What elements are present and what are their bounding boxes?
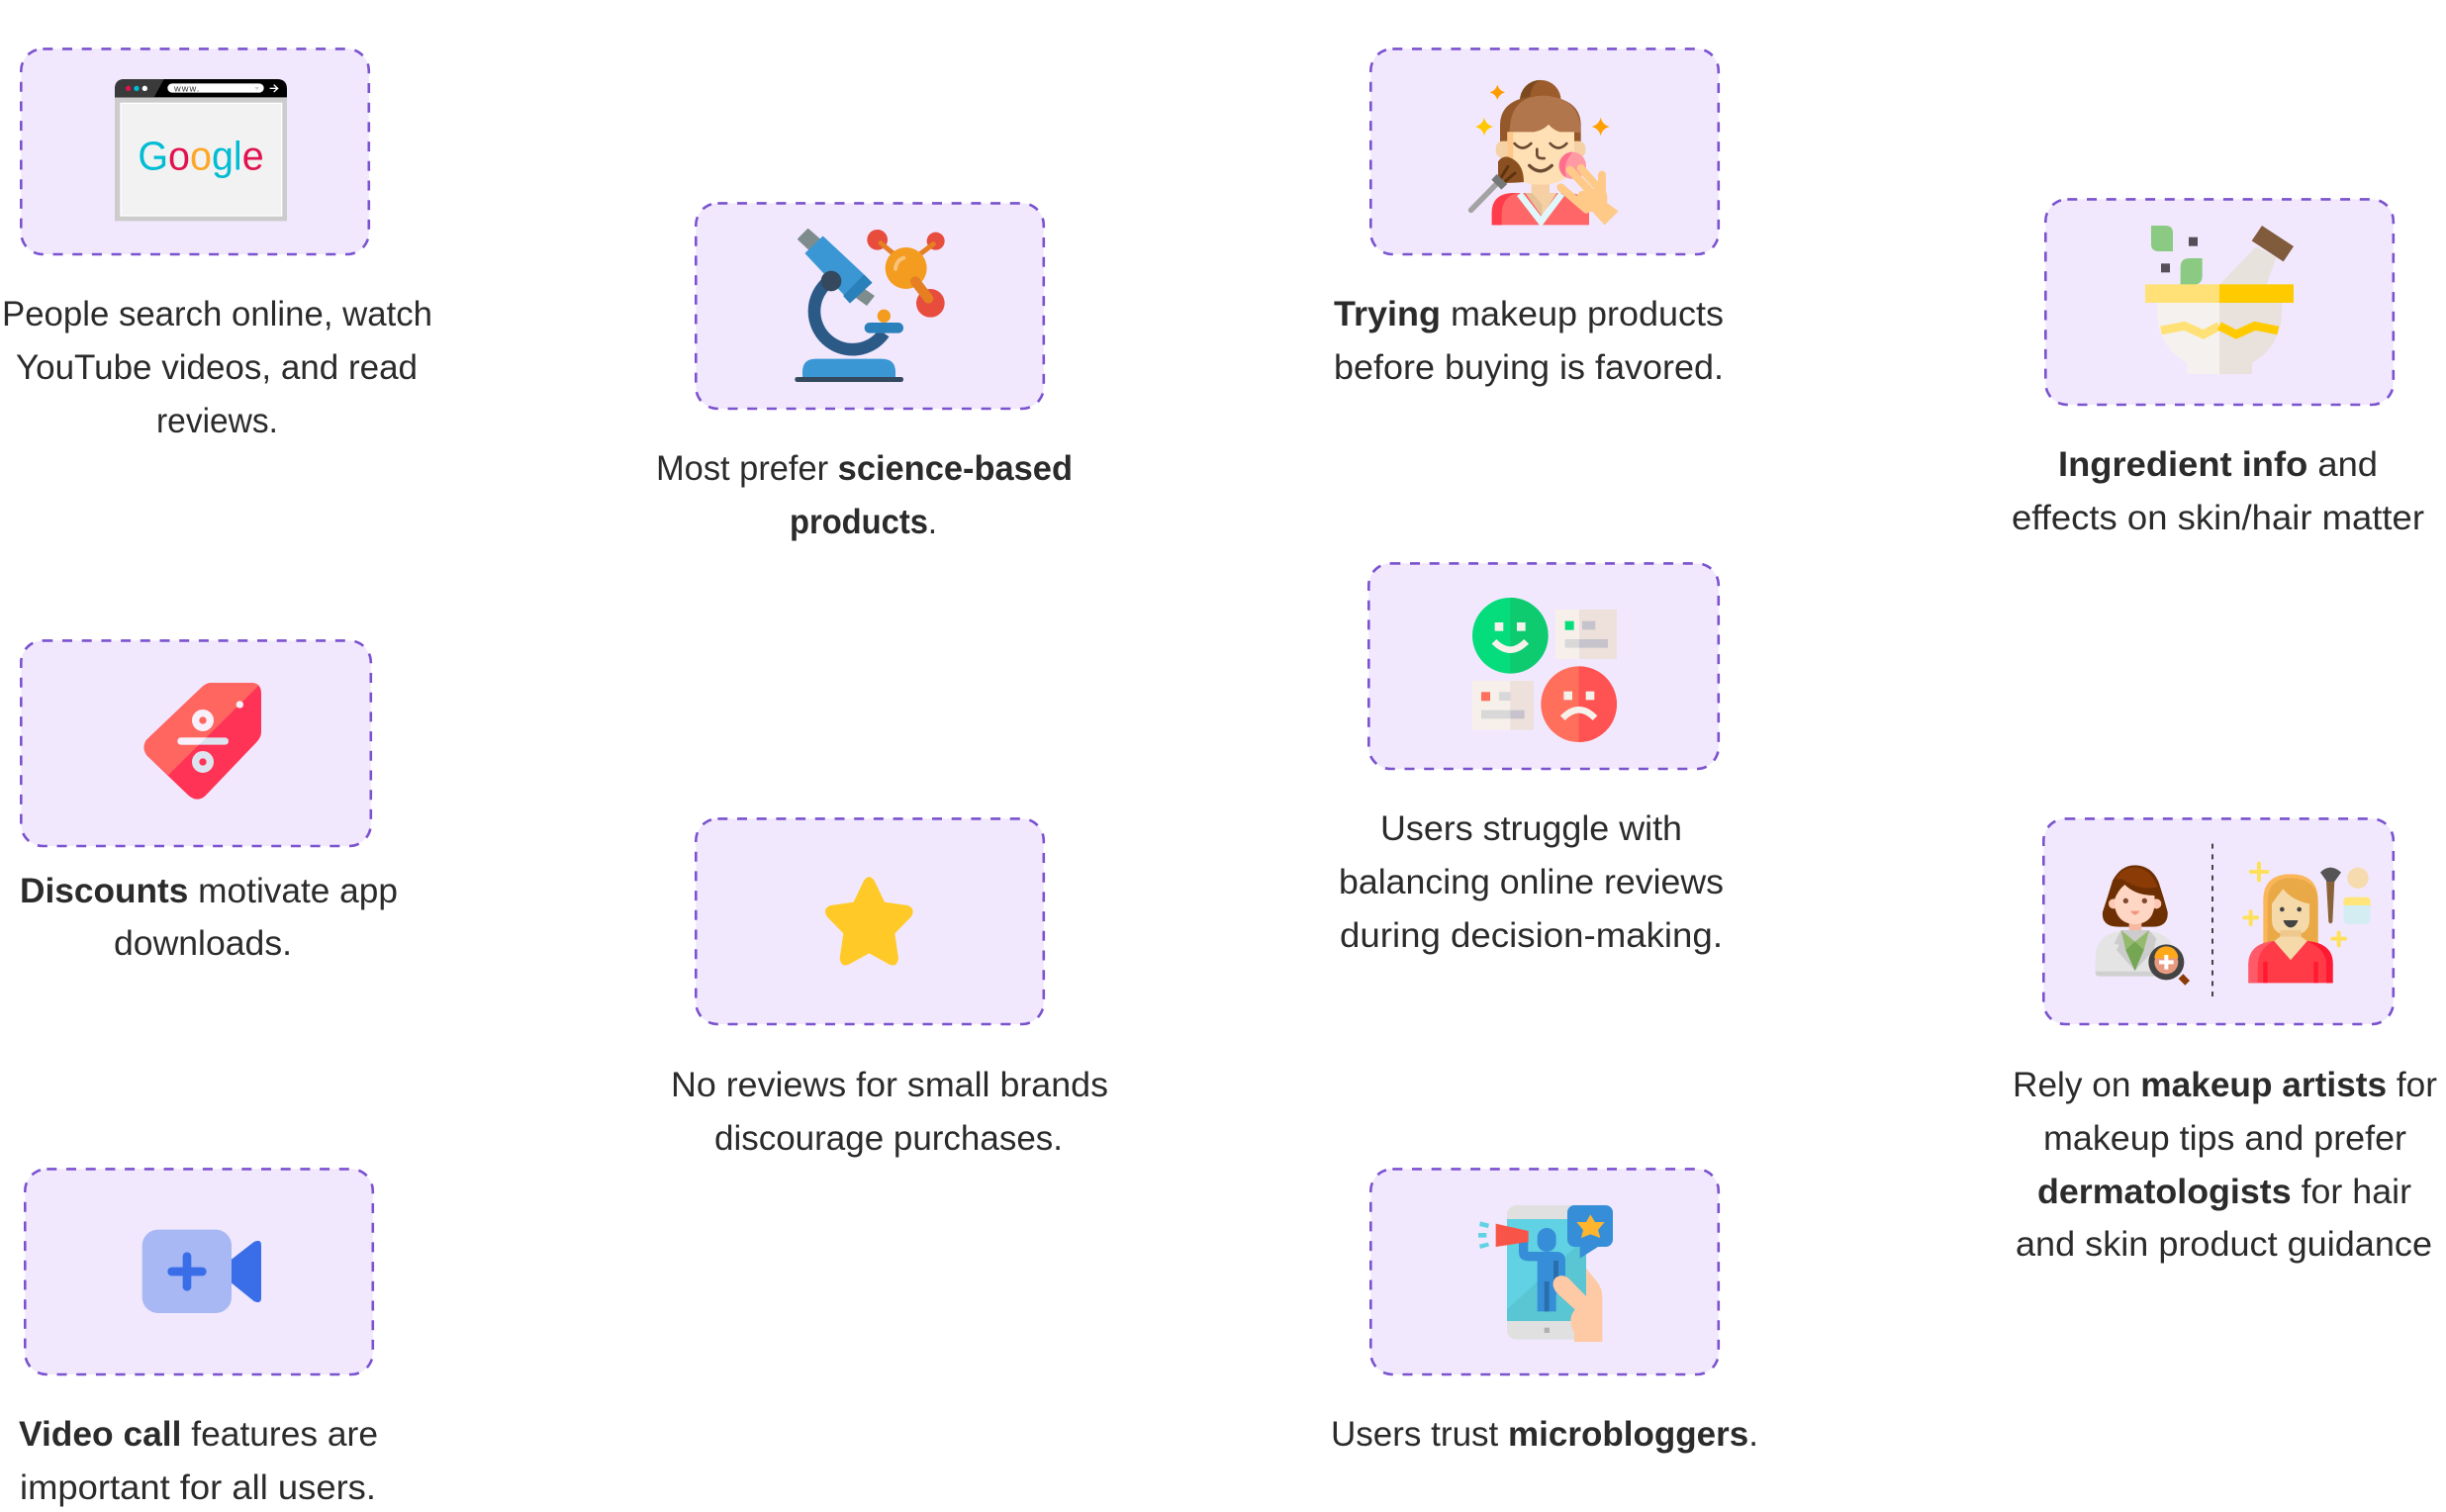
text: small brands reviews: [671, 1066, 1108, 1158]
panel: trying makeup: [1334, 48, 1724, 387]
icon: video camera plus: [142, 1230, 261, 1313]
panel: microbloggers: [1331, 1169, 1758, 1454]
icon: star: [825, 877, 913, 965]
icon: phone with influencer: [1478, 1205, 1613, 1342]
text: small brands reviews: discourage purchases.: [714, 1119, 1063, 1158]
text: ingredient info: [2012, 445, 2424, 537]
text: discounts: downloads.: [114, 924, 292, 963]
text: balancing reviews: during decision-making.: [1340, 916, 1723, 955]
text: video call: Video call features are: [19, 1415, 378, 1454]
text: ingredient info: Ingredient info and: [2058, 445, 2378, 484]
text: discounts: Discounts motivate app: [20, 872, 398, 910]
panel: makeup artists and dermatologists: [2013, 818, 2437, 1264]
text: small brands reviews: No reviews for small brands: [671, 1066, 1108, 1104]
text: ingredient info: effects on skin/hair matter: [2012, 499, 2424, 537]
panel: discounts: [20, 640, 398, 963]
text: trying makeup: Trying makeup products: [1334, 295, 1724, 333]
text: makeup artists and dermatologists: and skin product guidance: [2016, 1225, 2432, 1264]
text: balancing reviews: [1339, 809, 1724, 955]
text: balancing reviews: Users struggle with: [1380, 809, 1682, 848]
text: balancing reviews: balancing online reviews: [1339, 863, 1724, 901]
text: online search: [2, 295, 432, 440]
panel: online search: [2, 48, 432, 440]
icon: smiley and sad faces with reviews: [1472, 598, 1617, 742]
icon: browser with Google: www.: [173, 83, 199, 93]
text: online search: People search online, watch: [2, 295, 432, 333]
text: makeup artists and dermatologists: Rely on makeup artists for: [2013, 1066, 2437, 1104]
panel: science-based: [656, 203, 1073, 541]
panel: balancing reviews: [1339, 563, 1724, 955]
text: trying makeup: [1334, 295, 1724, 387]
text: science-based: Most prefer science-based: [656, 449, 1073, 488]
icon: mortar and pestle: [2145, 226, 2294, 374]
text: discounts: [20, 872, 398, 963]
icon: discount tag: [143, 683, 261, 800]
text: science-based: products.: [790, 503, 937, 541]
text: online search: YouTube videos, and read: [16, 348, 418, 387]
panel: small brands reviews: [671, 818, 1108, 1158]
text: trying makeup: before buying is favored.: [1334, 348, 1724, 387]
icon: browser with Google: Google: [138, 134, 264, 179]
text: makeup artists and dermatologists: [2013, 1066, 2437, 1264]
text: makeup artists and dermatologists: makeup tips and prefer: [2043, 1119, 2406, 1158]
panel: ingredient info: [2012, 199, 2424, 537]
text: makeup artists and dermatologists: dermatologists for hair: [2037, 1173, 2411, 1211]
text: online search: reviews.: [156, 402, 278, 440]
icon: dermatologist and makeup artist: [2096, 844, 2371, 998]
icon: browser with Google: [115, 79, 287, 221]
text: microbloggers: Users trust microbloggers.: [1331, 1415, 1758, 1454]
icon: microscope and molecule: [795, 230, 945, 382]
panel: video call: [19, 1169, 378, 1507]
text: science-based: [656, 449, 1073, 541]
text: video call: important for all users.: [20, 1468, 376, 1507]
icon: woman applying makeup: [1471, 80, 1619, 225]
text: video call: [19, 1415, 378, 1507]
